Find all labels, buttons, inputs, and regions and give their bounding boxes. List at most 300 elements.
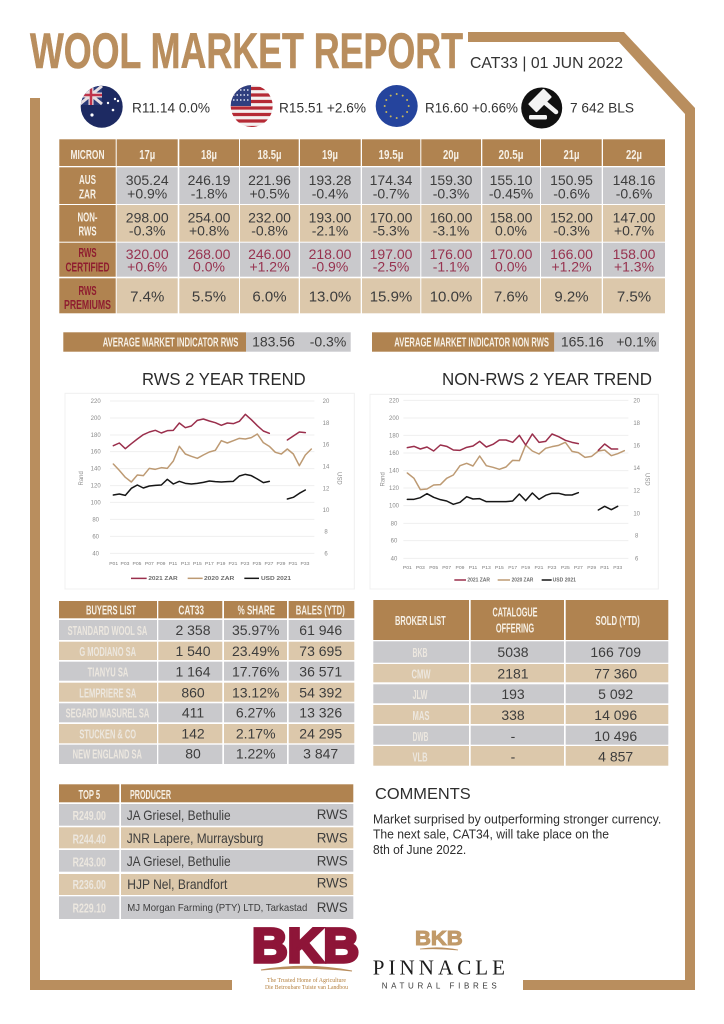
broker table rows: - xyxy=(511,749,516,765)
logo: Pinnacle Natural Fibres: PINNACLE xyxy=(373,955,505,979)
top 5 rows: HJP Nel, Brandfort xyxy=(127,876,227,892)
right axis labels: 12 xyxy=(633,489,641,495)
right axis labels: 18 xyxy=(633,421,641,427)
row: RWS certified: 218.00 xyxy=(309,246,352,262)
comments heading: COMMENTS xyxy=(375,786,471,803)
right axis labels: USD xyxy=(335,472,341,485)
row: AUS ZAR: +0.9% xyxy=(127,185,167,201)
row: non-RWS: 232.00 xyxy=(248,209,291,225)
period labels: P01 xyxy=(109,561,118,567)
row: non-RWS: 0.0% xyxy=(495,223,527,239)
right axis labels xyxy=(633,398,649,562)
row: RWS certified: 176.00 xyxy=(430,246,473,262)
period labels xyxy=(403,565,622,571)
row: RWS certified: 320.00 xyxy=(126,246,169,262)
right axis labels: 6 xyxy=(635,556,639,562)
broker table rows: DWB xyxy=(413,730,428,744)
left axis labels: 220 xyxy=(389,398,400,404)
icon: US flag xyxy=(230,85,274,129)
left axis labels: 80 xyxy=(92,517,100,523)
left axis labels: 220 xyxy=(91,399,101,405)
row: AUS ZAR: -0.3% xyxy=(433,185,469,201)
row: AUS ZAR: 193.28 xyxy=(309,172,352,188)
row: RWS certified: 197.00 xyxy=(370,246,413,262)
buyers table rows: STUCKEN & CO xyxy=(79,727,136,741)
buyers table rows: 35.97% xyxy=(232,622,279,638)
top 5 rows: R236.00 xyxy=(73,878,106,892)
row: RWS certified: 268.00 xyxy=(188,246,231,262)
series: 2020 ZAR xyxy=(113,434,311,482)
row: RWS premiums: 7.6% xyxy=(494,289,528,306)
broker table rows xyxy=(412,644,641,765)
period labels: P19 xyxy=(521,565,530,571)
buyers table rows: STANDARD WOOL SA xyxy=(68,624,147,638)
broker table rows: 193 xyxy=(501,686,525,702)
period labels: P09 xyxy=(456,565,465,571)
table header row xyxy=(70,148,642,162)
period labels: P17 xyxy=(508,565,517,571)
row: non-RWS: -5.3% xyxy=(373,223,409,239)
row: RWS certified: 170.00 xyxy=(490,246,533,262)
average market indicator RWS: -0.3% xyxy=(310,334,346,350)
right axis labels: 20 xyxy=(323,399,330,405)
period labels: P11 xyxy=(169,561,177,567)
top 5 rows: RWS xyxy=(317,830,348,846)
row: RWS premiums xyxy=(64,284,651,312)
average market indicator non RWS: 165.16 xyxy=(561,334,604,350)
row: non-RWS: 147.00 xyxy=(613,209,656,225)
buyers table rows xyxy=(66,622,342,762)
buyers table rows: 411 xyxy=(182,705,204,721)
period labels: P27 xyxy=(265,561,274,567)
table header row: 19µ xyxy=(322,148,338,162)
buyers table rows: 13 326 xyxy=(299,705,342,721)
row: AUS ZAR: -0.45% xyxy=(489,185,533,201)
broker table rows: 10 496 xyxy=(594,728,637,744)
buyers table rows: 23.49% xyxy=(232,643,279,659)
broker table rows: 14 096 xyxy=(594,707,637,723)
left axis labels: 200 xyxy=(91,416,101,422)
chart legend xyxy=(131,576,291,582)
buyers table backgrounds xyxy=(59,601,354,764)
row: RWS certified: +0.6% xyxy=(127,259,167,275)
buyers table header: BALES (YTD) xyxy=(296,603,345,617)
row: RWS certified: -1.1% xyxy=(433,259,469,275)
heading: non-RWS trend: NON-RWS 2 YEAR TREND xyxy=(442,369,652,389)
row: RWS certified: 246.00 xyxy=(248,246,291,262)
period labels: P29 xyxy=(587,565,596,571)
series: 2020 ZAR xyxy=(407,442,624,490)
row: AUS ZAR: -1.8% xyxy=(191,185,227,201)
left axis labels: 160 xyxy=(389,451,400,457)
buyers table rows: 2 358 xyxy=(175,622,211,638)
right axis labels: 12 xyxy=(323,486,330,492)
buyers table rows: 13.12% xyxy=(232,684,279,700)
average market indicator RWS: 183.56 xyxy=(252,334,295,350)
row: RWS certified: CERTIFIED xyxy=(66,261,110,275)
right axis labels: 18 xyxy=(323,421,330,427)
left axis labels: 100 xyxy=(91,500,101,506)
top 5 rows: MJ Morgan Farming (PTY) LTD, Tarkastad xyxy=(127,902,307,914)
row: non-RWS: -2.1% xyxy=(312,223,348,239)
left axis labels: 140 xyxy=(91,467,101,473)
buyers table rows: 61 946 xyxy=(299,622,342,638)
buyers table header: BUYERS LIST xyxy=(86,603,136,617)
row: non-RWS: +0.7% xyxy=(614,223,654,239)
row: non-RWS xyxy=(78,209,656,239)
row: AUS ZAR: +0.5% xyxy=(249,185,290,201)
average market indicator non RWS: +0.1% xyxy=(616,334,656,350)
left axis labels: 180 xyxy=(389,433,400,439)
left axis labels: Rand xyxy=(79,471,85,485)
title: WOOL MARKET REPORT xyxy=(30,23,463,79)
comments text: Market surprised by outperforming stronger currency. xyxy=(373,811,661,826)
broker table rows: - xyxy=(511,728,516,744)
period labels: P15 xyxy=(495,565,504,571)
period labels: P05 xyxy=(429,565,438,571)
row: RWS certified: +1.2% xyxy=(551,259,592,275)
row: AUS ZAR: 305.24 xyxy=(126,172,169,188)
top 5 header xyxy=(78,788,171,802)
chart legend: USD 2021 xyxy=(553,578,576,584)
buyers table rows: 36 571 xyxy=(299,664,342,680)
buyers table rows: 142 xyxy=(181,725,205,741)
average market indicator non RWS: AVERAGE MARKET INDICATOR NON RWS xyxy=(394,336,549,350)
row: RWS premiums: 13.0% xyxy=(309,289,351,306)
comments text: The next sale, CAT34, will take place on the xyxy=(373,826,609,841)
average market indicator RWS xyxy=(63,332,351,352)
sale date: CAT33 | 01 JUN 2022 xyxy=(470,55,623,72)
period labels: P03 xyxy=(416,565,425,571)
row: RWS certified: +1.2% xyxy=(249,259,290,275)
period labels: P23 xyxy=(548,565,557,571)
top 5 rows: RWS xyxy=(317,806,348,822)
left axis labels: 180 xyxy=(91,433,101,439)
row: non-RWS: -0.3% xyxy=(129,223,165,239)
top 5 rows: JA Griesel, Bethulie xyxy=(127,807,231,823)
table header row: 21µ xyxy=(564,148,580,162)
row: RWS certified: -2.5% xyxy=(373,259,409,275)
period labels: P01 xyxy=(403,565,412,571)
left axis labels: 120 xyxy=(389,486,400,492)
row: AUS ZAR: -0.7% xyxy=(373,185,409,201)
table header row: 19.5µ xyxy=(378,148,404,162)
buyers table rows: 24 295 xyxy=(299,725,342,741)
AUD rate: R11.14 0.0% xyxy=(132,100,210,116)
row: AUS ZAR: 246.19 xyxy=(188,172,231,188)
broker table rows: CMW xyxy=(412,667,431,681)
row: RWS certified: 166.00 xyxy=(550,246,593,262)
buyers table rows: 1 540 xyxy=(175,643,211,659)
line chart: RWS 2 year trend xyxy=(65,393,354,589)
broker table header: SOLD (YTD) xyxy=(596,614,640,628)
broker table rows: BKB xyxy=(412,646,428,660)
row: RWS premiums: 9.2% xyxy=(554,289,589,306)
row: AUS ZAR: 148.16 xyxy=(613,172,656,188)
buyers list table xyxy=(59,601,354,764)
broker table header: BROKER LIST xyxy=(395,614,446,628)
broker table rows: VLB xyxy=(412,751,428,765)
logo: Pinnacle Natural Fibres: NATURAL FIBRES xyxy=(382,981,497,990)
row: non-RWS: 160.00 xyxy=(430,209,473,225)
top 5 producers table xyxy=(59,784,353,919)
row: non-RWS: NON- xyxy=(78,211,98,225)
period labels xyxy=(109,561,310,567)
top 5 header: TOP 5 xyxy=(78,788,100,802)
period labels: P21 xyxy=(229,561,238,567)
row: non-RWS: -0.8% xyxy=(251,223,288,239)
line chart: non-RWS 2 year trend xyxy=(370,394,658,589)
row: RWS premiums: 6.0% xyxy=(252,289,287,306)
period labels: P33 xyxy=(301,561,310,567)
table header row: 20.5µ xyxy=(498,148,524,162)
row: AUS ZAR: 150.95 xyxy=(550,172,593,188)
row: non-RWS: RWS xyxy=(78,224,96,238)
period labels: P03 xyxy=(121,561,130,567)
broker table rows: 5 092 xyxy=(598,686,633,702)
comments block xyxy=(373,786,661,857)
row: RWS certified: 0.0% xyxy=(193,259,225,275)
row: AUS ZAR: AUS xyxy=(79,173,96,187)
row: RWS certified: RWS xyxy=(78,246,96,260)
period labels: P31 xyxy=(600,565,609,571)
row: RWS certified: 0.0% xyxy=(495,259,527,275)
buyers table rows: NEW ENGLAND SA xyxy=(73,748,142,762)
right axis labels xyxy=(323,399,341,557)
average market indicator non RWS xyxy=(372,332,659,352)
left axis labels: 160 xyxy=(91,450,101,456)
period labels: P13 xyxy=(482,565,491,571)
buyers table header xyxy=(86,603,345,617)
period labels: P33 xyxy=(613,565,622,571)
comments text xyxy=(373,811,661,857)
row: AUS ZAR: 155.10 xyxy=(490,172,533,188)
row: non-RWS: 170.00 xyxy=(370,209,413,225)
broker table header: OFFERING xyxy=(496,622,534,636)
average market indicator RWS: AVERAGE MARKET INDICATOR RWS xyxy=(103,336,238,350)
series: 2021 ZAR xyxy=(113,414,305,449)
row: non-RWS: 152.00 xyxy=(550,209,593,225)
broker table rows: MAS xyxy=(412,709,430,723)
icon: EU flag xyxy=(376,85,418,127)
row: RWS certified: -0.9% xyxy=(312,259,348,275)
period labels: P29 xyxy=(277,561,286,567)
left axis labels: 80 xyxy=(391,521,398,527)
left axis labels: 60 xyxy=(391,539,398,545)
top 5 rows: R244.40 xyxy=(73,832,106,846)
top 5 rows: R243.00 xyxy=(73,856,106,870)
logo: BKB: Die Betroubare Tuiste van Landbou xyxy=(265,985,348,991)
right axis labels: 6 xyxy=(324,551,328,557)
row: RWS premiums: 10.0% xyxy=(430,289,472,306)
left axis labels: 40 xyxy=(92,551,100,557)
top 5 backgrounds xyxy=(59,784,353,919)
top 5 rows: R229.10 xyxy=(73,901,106,915)
row: RWS certified xyxy=(66,246,656,275)
broker table header: CATALOGUE xyxy=(492,606,538,620)
buyers table rows: 80 xyxy=(185,746,201,762)
period labels: P07 xyxy=(145,561,154,567)
right axis labels: 10 xyxy=(323,508,330,514)
table header row: 22µ xyxy=(626,148,642,162)
top 5 rows: JA Griesel, Bethulie xyxy=(127,853,231,869)
period labels: P15 xyxy=(193,561,202,567)
broker table rows: 2181 xyxy=(497,665,529,681)
table header row: 18µ xyxy=(201,148,217,162)
series: 2021 ZAR xyxy=(407,434,618,451)
row: non-RWS: 158.00 xyxy=(490,209,533,225)
right axis labels: 16 xyxy=(323,443,330,449)
table header row: 17µ xyxy=(139,148,155,162)
comments text: 8th of June 2022. xyxy=(373,842,466,857)
buyers table rows: 2.17% xyxy=(236,725,276,741)
row: RWS premiums: 15.9% xyxy=(370,289,412,306)
top 5 header: PRODUCER xyxy=(130,788,171,802)
period labels: P31 xyxy=(289,561,298,567)
left axis labels xyxy=(79,399,101,557)
period labels: P11 xyxy=(469,565,477,571)
period labels: P19 xyxy=(217,561,226,567)
broker list table xyxy=(373,600,668,766)
broker table rows: 166 709 xyxy=(590,644,641,660)
row: RWS premiums: PREMIUMS xyxy=(64,298,111,312)
buyers table rows: LEMPRIERE SA xyxy=(79,686,136,700)
period labels: P21 xyxy=(535,565,544,571)
row: AUS ZAR: -0.6% xyxy=(616,185,652,201)
icon: Australian flag xyxy=(80,85,124,129)
right axis labels: USD xyxy=(643,473,649,486)
left axis labels: 120 xyxy=(91,484,101,490)
buyers table header: CAT33 xyxy=(178,603,204,617)
heading: RWS trend: RWS 2 YEAR TREND xyxy=(142,369,306,389)
buyers table rows: 3 847 xyxy=(303,746,338,762)
buyers table rows: SEGARD MASUREL SA xyxy=(66,707,149,721)
buyers table rows: G MODIANO SA xyxy=(79,645,136,659)
broker table header xyxy=(395,606,640,636)
table header row: 20µ xyxy=(443,148,459,162)
buyers table rows: 1.22% xyxy=(236,746,276,762)
left axis labels xyxy=(381,398,400,562)
row: non-RWS: -3.1% xyxy=(433,223,469,239)
row: AUS ZAR: ZAR xyxy=(79,187,96,201)
left axis labels: 100 xyxy=(389,504,400,510)
period labels: P25 xyxy=(253,561,262,567)
micron price table xyxy=(59,139,665,313)
period labels: P07 xyxy=(442,565,451,571)
buyers table header: % SHARE xyxy=(238,603,275,617)
right axis labels: 14 xyxy=(323,464,330,470)
top 5 rows: RWS xyxy=(317,875,348,891)
left axis labels: Rand xyxy=(381,472,387,486)
row: non-RWS: 254.00 xyxy=(188,209,231,225)
chart legend: 2020 ZAR xyxy=(512,578,533,584)
buyers table rows: 73 695 xyxy=(299,643,342,659)
right axis labels: 8 xyxy=(324,530,328,536)
series: USD 2021 xyxy=(113,474,305,499)
table header row: 18.5µ xyxy=(258,148,282,162)
row: non-RWS: 193.00 xyxy=(309,209,352,225)
right axis labels: 10 xyxy=(633,511,641,517)
top 5 rows: R249.00 xyxy=(73,809,106,823)
table cell backgrounds xyxy=(59,139,665,313)
broker table rows: JLW xyxy=(412,688,428,702)
left axis labels: 200 xyxy=(389,416,400,422)
buyers table rows: 6.27% xyxy=(236,705,276,721)
row: AUS ZAR xyxy=(79,172,656,201)
buyers table rows: TIANYU SA xyxy=(88,666,128,680)
period labels: P09 xyxy=(157,561,166,567)
broker table rows: 4 857 xyxy=(598,749,633,765)
period labels: P25 xyxy=(561,565,570,571)
row: RWS premiums: 5.5% xyxy=(192,289,226,306)
row: non-RWS: +0.8% xyxy=(189,223,229,239)
buyers table rows: 54 392 xyxy=(299,684,342,700)
chart legend: USD 2021 xyxy=(261,576,291,582)
row: RWS premiums: 7.4% xyxy=(130,289,164,306)
row: AUS ZAR: 159.30 xyxy=(430,172,473,188)
right axis labels: 14 xyxy=(633,466,641,472)
chart legend xyxy=(454,578,576,584)
broker table backgrounds xyxy=(373,600,668,766)
left axis labels: 60 xyxy=(92,534,100,540)
logo: Pinnacle Natural Fibres xyxy=(373,928,505,990)
period labels: P27 xyxy=(574,565,583,571)
left axis labels: 140 xyxy=(389,469,400,475)
EUR rate: R16.60 +0.66% xyxy=(425,100,518,116)
top 5 rows xyxy=(73,806,348,915)
top 5 rows: JNR Lapere, Murraysburg xyxy=(127,830,263,846)
USD rate: R15.51 +2.6% xyxy=(279,100,366,116)
chart legend: 2021 ZAR xyxy=(148,576,178,582)
row: non-RWS: 298.00 xyxy=(126,209,169,225)
broker table rows: 5038 xyxy=(497,644,529,660)
series: USD 2021 xyxy=(407,493,618,510)
chart legend: 2020 ZAR xyxy=(204,576,234,582)
chart legend: 2021 ZAR xyxy=(467,578,490,584)
row: AUS ZAR: -0.4% xyxy=(312,185,348,201)
buyers table rows: 860 xyxy=(181,684,205,700)
row: AUS ZAR: 221.96 xyxy=(248,172,291,188)
icon: auction gavel xyxy=(521,88,562,128)
right axis labels: 8 xyxy=(635,534,639,540)
row: RWS certified: 158.00 xyxy=(613,246,656,262)
right axis labels: 20 xyxy=(633,398,641,404)
top 5 rows: RWS xyxy=(317,899,348,915)
left axis labels: 40 xyxy=(391,556,398,562)
row: non-RWS: -0.3% xyxy=(553,223,590,239)
row: AUS ZAR: 174.34 xyxy=(370,172,413,188)
table header row: MICRON xyxy=(70,148,104,162)
period labels: P23 xyxy=(241,561,250,567)
row: RWS certified: +1.3% xyxy=(614,259,654,275)
row: RWS premiums: RWS xyxy=(78,284,96,298)
currency and bales strip xyxy=(80,85,634,129)
row: RWS premiums: 7.5% xyxy=(617,289,651,306)
row: AUS ZAR: -0.6% xyxy=(553,185,590,201)
top 5 rows: RWS xyxy=(317,853,348,869)
bales offered: 7 642 BLS xyxy=(570,100,634,116)
broker table rows: 77 360 xyxy=(594,665,637,681)
logo: Pinnacle Natural Fibres: BKB xyxy=(415,928,463,950)
right axis labels: 16 xyxy=(633,444,641,450)
period labels: P13 xyxy=(181,561,190,567)
buyers table rows: 1 164 xyxy=(175,664,211,680)
period labels: P17 xyxy=(205,561,214,567)
buyers table rows: 17.76% xyxy=(232,664,279,680)
logo: BKB: The Trusted Home of Agriculture xyxy=(267,977,346,984)
period labels: P05 xyxy=(133,561,142,567)
logo: BKB: BKB xyxy=(252,920,359,973)
